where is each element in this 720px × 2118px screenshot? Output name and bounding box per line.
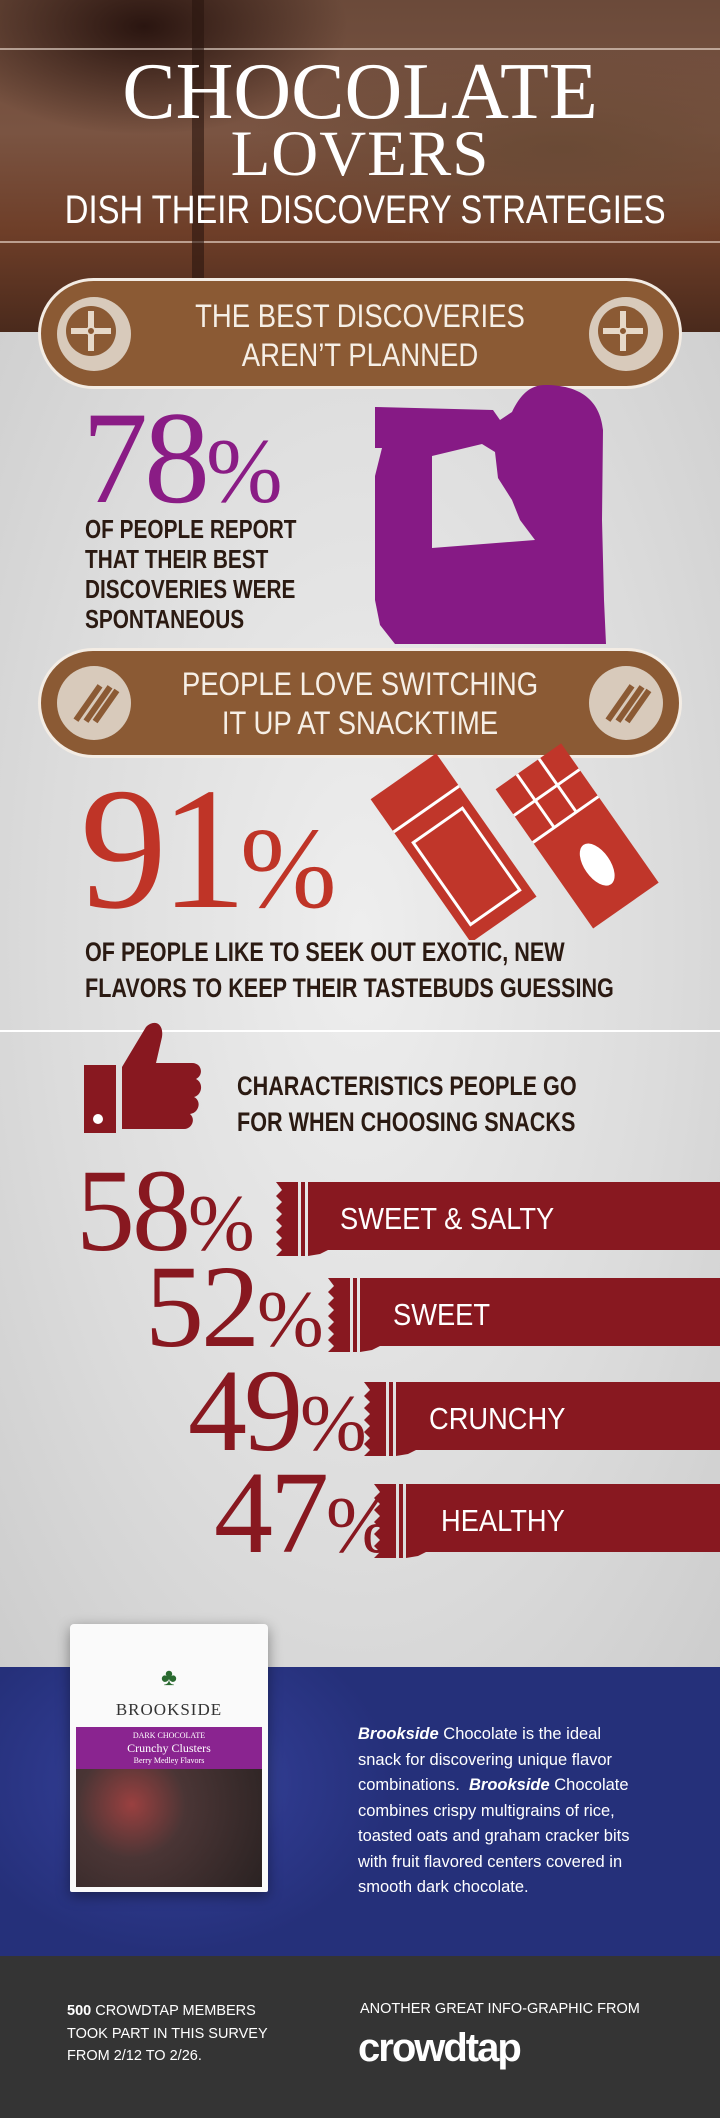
bar: 52% sweet — [145, 1241, 720, 1372]
icon: compass left — [57, 296, 131, 370]
text: exotic flavors — [85, 937, 614, 1003]
header: chocolate photo background — [0, 0, 720, 332]
title: DISH THEIR DISCOVERY STRATEGIES — [65, 188, 666, 232]
stat: 78%: 78% — [82, 384, 279, 531]
pill: the best discoveries: AREN’T PLANNED — [242, 337, 478, 373]
title — [65, 48, 666, 232]
bar chart: snack characteristics — [76, 1145, 720, 1578]
text: promo paragraph: with fruit flavored centers covered in — [358, 1852, 622, 1870]
product: brookside bag: DARK CHOCOLATE — [133, 1731, 205, 1740]
pill: the best discoveries: THE BEST DISCOVERIES — [195, 298, 525, 334]
heading: characteristics: FOR WHEN CHOOSING SNACKS — [237, 1107, 575, 1137]
text: survey note: 500 CROWDTAP MEMBERS — [67, 2003, 256, 2019]
bar: 47% healthy: 47% — [214, 1447, 390, 1578]
bar: 47% healthy — [214, 1447, 720, 1578]
bar: 52% sweet: 52% — [145, 1241, 321, 1372]
title: LOVERS — [231, 118, 489, 190]
text: survey note — [67, 2003, 268, 2064]
text: spontaneous: OF PEOPLE REPORT — [85, 514, 296, 544]
text: spontaneous: SPONTANEOUS — [85, 604, 244, 634]
product: brookside bag: ♣ — [161, 1664, 177, 1691]
pill: the best discoveries — [38, 278, 682, 389]
text: promo paragraph: combines crispy multigrains of rice, — [358, 1802, 615, 1820]
heading: characteristics — [237, 1071, 577, 1137]
text: promo paragraph — [358, 1725, 629, 1896]
bar: 58% sweet & salty: 58% — [76, 1145, 252, 1276]
bar: 58% sweet & salty: SWEET & SALTY — [340, 1201, 554, 1236]
text: promo paragraph: smooth dark chocolate. — [358, 1878, 529, 1896]
icon: cutlery left — [57, 666, 131, 740]
text: credit: ANOTHER GREAT INFO-GRAPHIC FROM — [360, 2001, 640, 2017]
stat: 91%: 91% — [80, 752, 330, 945]
icon: cutlery right — [589, 666, 663, 740]
logo: crowdtap: crowdtap — [358, 2026, 520, 2070]
title: CHOCOLATE — [122, 48, 598, 136]
icon: person with binoculars — [375, 385, 606, 644]
bar: 58% sweet & salty — [76, 1145, 720, 1276]
footer — [0, 1956, 720, 2118]
text: exotic flavors: FLAVORS TO KEEP THEIR TASTEBUDS GUESSING — [85, 973, 614, 1003]
text: exotic flavors: OF PEOPLE LIKE TO SEEK OUT EXOTIC, NEW — [85, 937, 565, 967]
bar: 52% sweet: SWEET — [393, 1297, 490, 1332]
text: promo paragraph: combinations. Brookside Chocolate — [358, 1776, 629, 1794]
icon: chocolate bars — [370, 744, 659, 940]
product: brookside bag — [70, 1624, 268, 1892]
bar: 49% crunchy: CRUNCHY — [429, 1401, 565, 1436]
text: promo paragraph: Brookside Chocolate is the ideal — [358, 1725, 601, 1743]
text: spontaneous: DISCOVERIES WERE — [85, 574, 295, 604]
product: brookside bag: Berry Medley Flavors — [134, 1756, 204, 1765]
panel: brookside promo — [0, 1667, 720, 1956]
bar: 47% healthy: HEALTHY — [441, 1503, 565, 1538]
text: survey note: TOOK PART IN THIS SURVEY — [67, 2026, 268, 2042]
icon: compass right — [589, 296, 663, 370]
pill: switching at snacktime: PEOPLE LOVE SWITCHING — [182, 666, 538, 702]
bar: 49% crunchy — [188, 1345, 720, 1476]
bar: 49% crunchy: 49% — [188, 1345, 364, 1476]
icon: thumbs up — [84, 1022, 202, 1133]
text: survey note: FROM 2/12 TO 2/26. — [67, 2048, 202, 2064]
gray textured background — [0, 332, 720, 1667]
text: promo paragraph: toasted oats and graham cracker bits — [358, 1827, 629, 1845]
text: spontaneous — [85, 514, 296, 634]
text: promo paragraph: snack for discovering unique flavor — [358, 1750, 612, 1768]
text: spontaneous: THAT THEIR BEST — [85, 544, 268, 574]
product: brookside bag: Crunchy Clusters — [127, 1741, 211, 1755]
product: brookside bag: BROOKSIDE — [116, 1700, 222, 1719]
pill: switching at snacktime: IT UP AT SNACKTIME — [222, 705, 498, 741]
pill: switching at snacktime — [38, 648, 682, 758]
heading: characteristics: CHARACTERISTICS PEOPLE GO — [237, 1071, 577, 1101]
